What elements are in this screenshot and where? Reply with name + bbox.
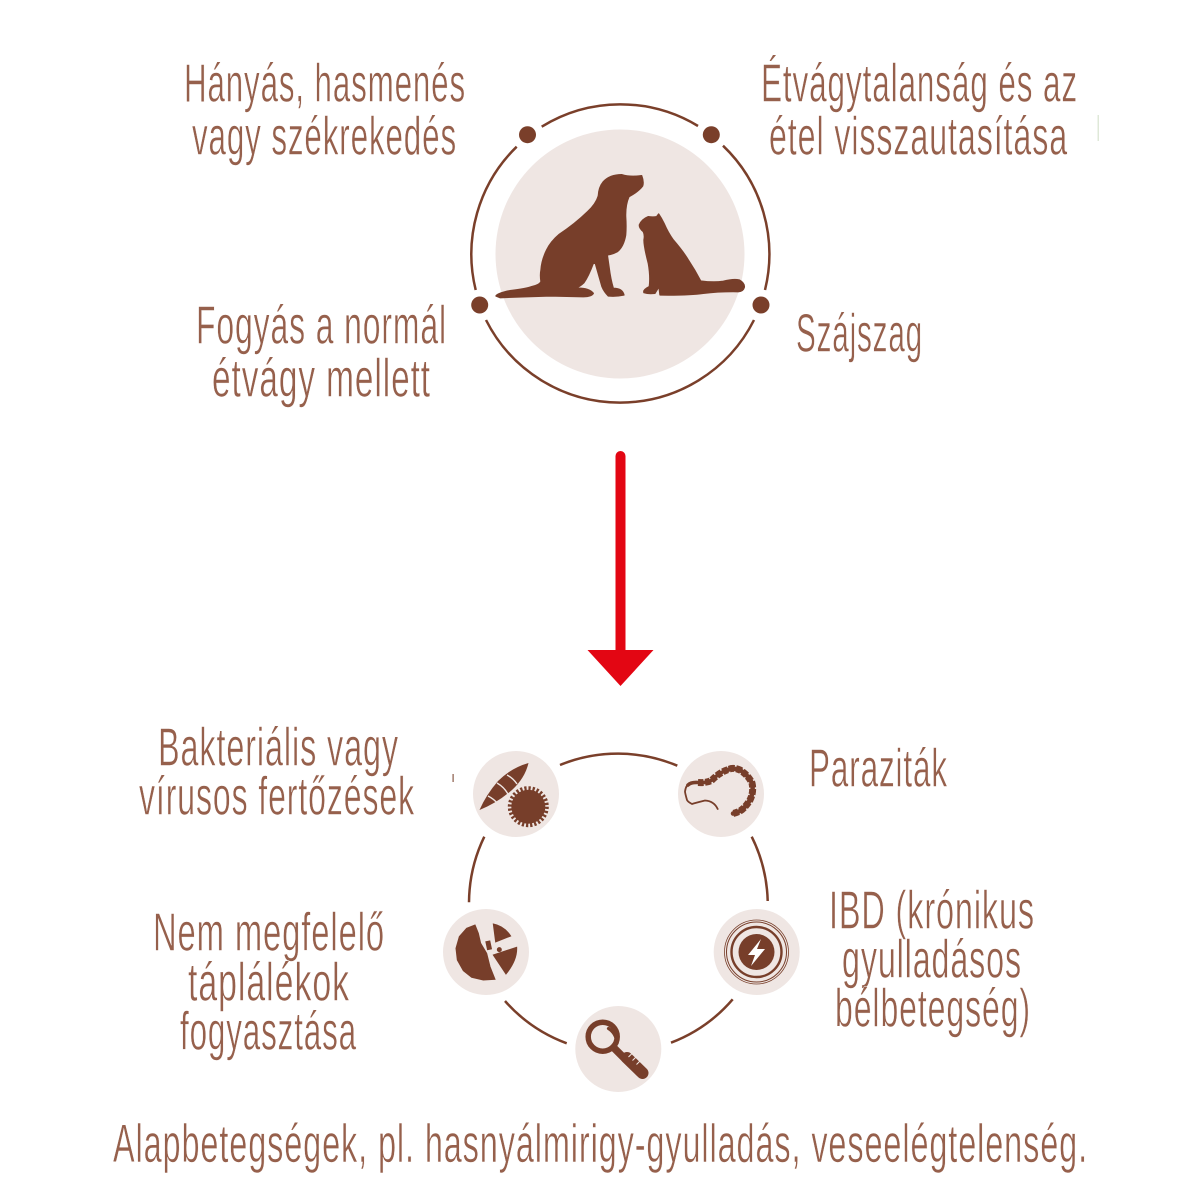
cause: bacterial or viral infection: vírusos fertőzések xyxy=(139,766,415,826)
symptom: loss of appetite xyxy=(761,54,1078,166)
cause: IBD xyxy=(829,880,1035,1038)
cause: bacterial or viral infection: Bakteriális vagy xyxy=(158,718,399,778)
icon: magnifying glass xyxy=(575,1006,661,1092)
cause: unsuitable food: Nem megfelelő xyxy=(153,902,385,962)
cause: unsuitable food: fogyasztása xyxy=(180,1002,357,1062)
stray mark right xyxy=(1098,115,1099,141)
icon: dog and cat silhouette xyxy=(496,175,744,298)
icon: inflammation xyxy=(714,909,800,995)
cause: unsuitable food: táplálékok xyxy=(188,952,350,1012)
symptom: vomiting, diarrhea or constipation: Hányás, hasmenés xyxy=(184,54,466,114)
panel: causes xyxy=(113,718,1088,1174)
symptom: weight loss: étvágy mellett xyxy=(212,348,431,408)
stray mark left xyxy=(452,774,454,782)
panel: symptoms xyxy=(184,54,1078,408)
icon: bacteria and virus xyxy=(473,751,559,837)
arrow xyxy=(588,456,654,686)
symptom: vomiting, diarrhea or constipation xyxy=(184,54,466,166)
symptom: bad breath: Szájszag xyxy=(796,304,923,364)
cause: IBD: IBD (krónikus xyxy=(829,880,1035,940)
icon: broken food xyxy=(443,909,529,995)
cause: unsuitable food xyxy=(153,902,385,1062)
cause: parasites: Paraziták xyxy=(809,738,948,798)
icon: dog and cat ring xyxy=(471,104,770,403)
ring arcs xyxy=(469,754,768,1043)
icon: parasite worm xyxy=(678,751,764,837)
symptom: vomiting, diarrhea or constipation: vagy székrekedés xyxy=(192,106,457,166)
cause: IBD: gyulladásos xyxy=(842,930,1022,990)
symptom: weight loss xyxy=(196,296,447,408)
symptom: weight loss: Fogyás a normál xyxy=(196,296,447,356)
cause: IBD: bélbetegség) xyxy=(835,978,1031,1038)
cause: bacterial or viral infection xyxy=(139,718,415,826)
